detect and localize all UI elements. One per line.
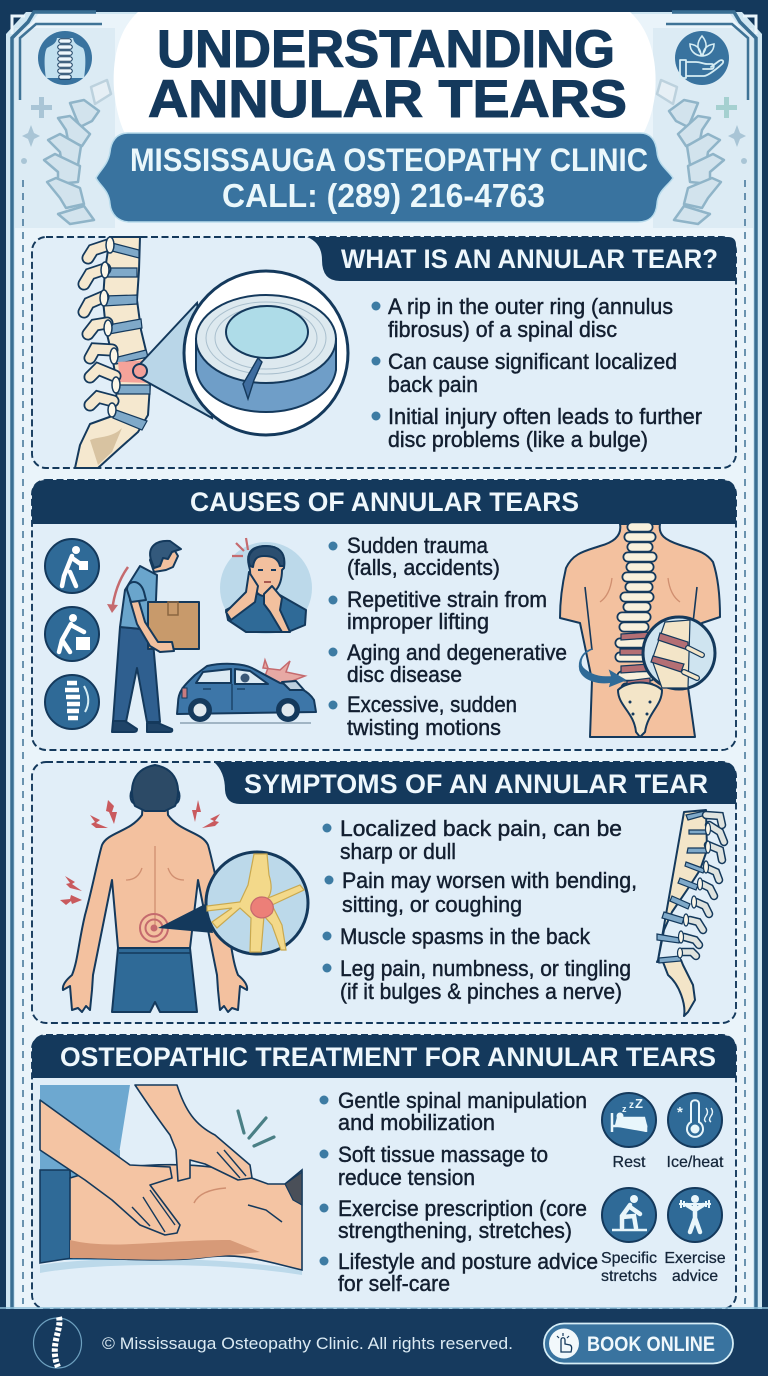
bullets: treatment: Soft tissue massage to [338, 1142, 548, 1167]
illustration: massage [40, 1085, 302, 1275]
illustration: back with spine [560, 524, 720, 737]
heading: what is an annular tear [307, 237, 736, 281]
heading: treatment: OSTEOPATHIC TREATMENT FOR ANNULAR TEARS [60, 1042, 716, 1072]
illustration: magnified torn disc [133, 271, 348, 435]
clinic banner: MISSISSAUGA OSTEOPATHY CLINIC [130, 142, 648, 178]
bullets: treatment: and mobilization [338, 1110, 495, 1135]
heading: symptoms: SYMPTOMS OF AN ANNULAR TEAR [244, 769, 708, 799]
title [148, 20, 627, 129]
bullets: symptoms [322, 816, 637, 1004]
bullets: causes: Repetitive strain from [347, 587, 547, 612]
heading: causes [32, 480, 736, 524]
bullets: symptoms: Muscle spasms in the back [340, 924, 591, 949]
icon: rest: Z [635, 1096, 643, 1111]
bullets: what is an annular tear: fibrosus) of a spinal disc [388, 317, 617, 342]
button: book online: BOOK ONLINE [587, 1333, 715, 1356]
bullets: causes [328, 533, 567, 740]
bullets: what is an annular tear: disc problems (like a bulge) [388, 427, 648, 452]
bullets: causes: twisting motions [347, 715, 501, 740]
icon: ice and heat [668, 1093, 722, 1147]
icon: curved spine [45, 675, 99, 729]
decorative spine left [44, 80, 111, 224]
bullets: causes: Sudden trauma [347, 533, 489, 558]
bullets: symptoms: (if it bulges & pinches a nerve) [340, 979, 622, 1004]
panel: causes [32, 480, 736, 750]
heading: what is an annular tear: WHAT IS AN ANNULAR TEAR? [341, 244, 718, 274]
bullets: causes: (falls, accidents) [347, 555, 500, 580]
label: specific stretches: Specific [601, 1250, 657, 1267]
bullets: causes: disc disease [347, 662, 462, 687]
illustration: side spine [657, 810, 724, 1016]
heading: treatment [32, 1035, 736, 1078]
icon: rest: z [629, 1100, 634, 1111]
panel: what is an annular tear [32, 237, 736, 468]
footer [0, 1308, 768, 1376]
clinic banner: CALL: (289) 216-4763 [222, 177, 545, 214]
heading: symptoms [214, 762, 736, 804]
copyright text: © Mississauga Osteopathy Clinic. All rights reserved. [102, 1334, 513, 1353]
title: ANNULAR TEARS [148, 70, 627, 129]
icon: ice and heat: * [677, 1104, 683, 1121]
bullets: causes: improper lifting [347, 609, 489, 634]
title backdrop [114, 12, 656, 140]
bullets: what is an annular tear: Initial injury often leads to further [388, 404, 702, 429]
label: rest: Rest [613, 1154, 646, 1171]
label: exercise advice: advice [672, 1268, 718, 1285]
icon: pain bolts [60, 800, 220, 905]
bullets: treatment: Lifestyle and posture advice [338, 1249, 598, 1274]
bullets: causes: Aging and degenerative [347, 640, 567, 665]
title: UNDERSTANDING [157, 20, 615, 79]
icon: rest [602, 1093, 656, 1147]
bullets: treatment: strengthening, stretches) [338, 1218, 572, 1243]
button: book online [544, 1324, 733, 1364]
decorative spine right [657, 80, 724, 224]
illustration: man lifting box [107, 541, 199, 732]
icon: spine torso badge [38, 31, 92, 85]
bullets: causes: Excessive, sudden [347, 692, 517, 717]
bullets: symptoms: Leg pain, numbness, or tingling [340, 956, 631, 981]
label: exercise advice: Exercise [664, 1250, 726, 1267]
label: specific stretches: stretchs [601, 1268, 657, 1285]
bullets: symptoms: Localized back pain, can be [340, 816, 622, 841]
bullets: symptoms: sharp or dull [340, 839, 456, 864]
icon: lifting strain [45, 539, 99, 593]
illustration: man in pain [220, 538, 312, 634]
decorative sparkles [21, 97, 747, 164]
icon: specific stretches [602, 1188, 656, 1242]
bullets: treatment [320, 1088, 598, 1296]
bullets: what is an annular tear: Can cause significant localized [388, 349, 677, 374]
illustration: crashed car [177, 660, 316, 723]
bullets: what is an annular tear: A rip in the outer ring (annulus [388, 294, 673, 319]
bullets: treatment: Exercise prescription (core [338, 1196, 587, 1221]
heading: causes: CAUSES OF ANNULAR TEARS [190, 487, 579, 517]
icon: rest: z [622, 1104, 627, 1114]
icon: bending with box [45, 607, 99, 661]
label: ice and heat: Ice/heat [667, 1154, 724, 1171]
bullets: symptoms: Pain may worsen with bending, [342, 868, 637, 893]
illustration: lumbar spine side view [75, 237, 150, 468]
icon: exercise advice [668, 1188, 722, 1242]
bullets: what is an annular tear [372, 294, 702, 452]
icon: footer spine logo [34, 1317, 82, 1368]
illustration: man from behind [63, 765, 247, 1012]
panel: symptoms [32, 762, 736, 1023]
panel: treatment [32, 1035, 736, 1309]
illustration: magnified nerve [158, 852, 308, 954]
bullets: symptoms: sitting, or coughing [342, 892, 522, 917]
bullets: what is an annular tear: back pain [388, 372, 478, 397]
bullets: treatment: reduce tension [338, 1165, 475, 1190]
bullets: treatment: Gentle spinal manipulation [338, 1088, 587, 1113]
clinic banner [96, 133, 673, 222]
bullets: treatment: for self-care [338, 1271, 450, 1296]
icon: hand and leaf badge [675, 31, 729, 85]
